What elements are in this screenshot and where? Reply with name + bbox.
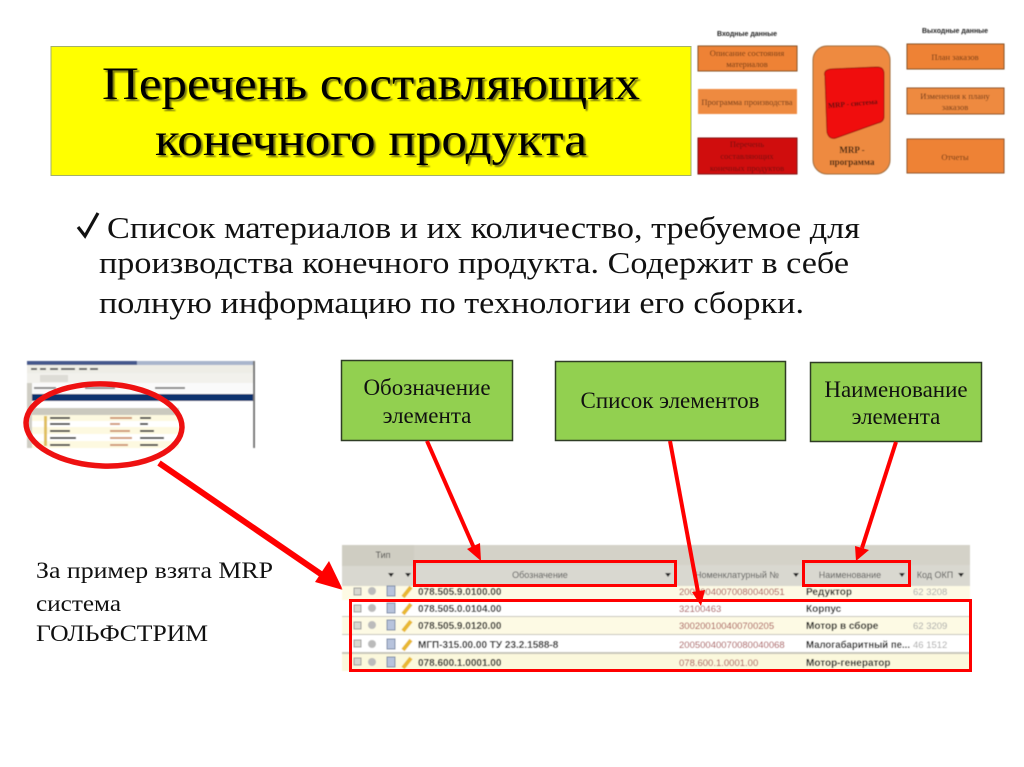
title text shadow: Перечень составляющих xyxy=(104,60,642,112)
table header: Номенклатурный № xyxy=(695,570,779,580)
arrow: screenshot to table xyxy=(159,463,343,590)
input box: materials state: Описание состояния xyxy=(710,48,784,58)
description text xyxy=(78,210,860,320)
heading: output data: Выходные данные xyxy=(922,28,988,35)
check mark xyxy=(78,213,98,236)
output box: plan changes xyxy=(907,88,1004,114)
table header xyxy=(342,545,970,586)
output box: plan changes: заказов xyxy=(942,102,968,112)
column: name: Корпус xyxy=(806,604,842,615)
title text: конечного продукта xyxy=(155,114,587,166)
row icons xyxy=(354,586,411,668)
arrow: name label to header xyxy=(855,442,896,561)
software screenshot thumbnail xyxy=(27,361,255,448)
description text: полную информацию по технологии его сборки. xyxy=(99,285,804,320)
column: item number: 32100463 xyxy=(679,604,721,615)
MRP programme block: программа xyxy=(830,157,875,167)
callout: green label element name: Наименование xyxy=(824,377,968,402)
red highlight: rows xyxy=(350,600,970,670)
column: designation: 078.505.9.0100.00 xyxy=(418,587,502,598)
input box: component list: составляющих xyxy=(720,151,774,161)
column: item number: 20050040070080040051 xyxy=(679,587,785,598)
example note xyxy=(36,558,273,646)
input box: component list xyxy=(698,138,797,174)
heading: input data: Входные данные xyxy=(717,31,777,38)
description text: производства конечного продукта. Содержит в себе xyxy=(99,245,849,280)
MRP diagram thumbnail xyxy=(698,28,1004,174)
column: item number: 300200100400700205 xyxy=(679,621,774,632)
arrow: designation label to header xyxy=(427,441,481,561)
input box: materials state xyxy=(698,46,797,71)
column: item number xyxy=(679,587,785,669)
column: item number: 20050040070080040068 xyxy=(679,640,785,651)
column: name: Мотор-генератор xyxy=(806,658,890,669)
example note: система xyxy=(36,591,121,616)
column: name: Малогабаритный пе... xyxy=(806,639,910,651)
arrow: element list label to rows xyxy=(670,441,705,606)
output box: reports: Отчеты xyxy=(941,152,969,162)
column: name: Редуктор xyxy=(806,587,852,598)
column: code: 62 3208 xyxy=(913,587,947,598)
output box: order plan: План заказов xyxy=(931,52,979,62)
callout: green label element list: Список элементов xyxy=(581,388,760,413)
example note: За пример взята MRP xyxy=(36,558,273,583)
input box: component list: конечных продуктов xyxy=(710,163,784,173)
column: designation: 078.505.0.0104.00 xyxy=(418,604,502,615)
callout: green label designation xyxy=(342,360,512,440)
MRP system tile: MRP - система xyxy=(828,97,878,110)
red highlight: designation header xyxy=(414,562,676,586)
input box: production programme xyxy=(698,89,797,114)
red highlight: name header xyxy=(804,562,910,586)
column: name: Мотор в сборе xyxy=(806,620,879,632)
title banner xyxy=(51,46,691,176)
column: code: 62 3209 xyxy=(913,621,947,632)
column: designation: 078.505.9.0120.00 xyxy=(418,621,502,632)
title text xyxy=(102,58,640,166)
callout: green label element name xyxy=(810,362,982,442)
column: name xyxy=(806,587,910,669)
MRP programme block xyxy=(813,46,890,174)
red ellipse highlight xyxy=(25,381,183,469)
output box: reports xyxy=(907,139,1004,173)
column: code: 46 1512 xyxy=(913,640,947,651)
description text: Список материалов и их количество, требуемое для xyxy=(107,210,860,245)
column: designation: МГП-315.00.00 ТУ 23.2.1588-8 xyxy=(418,640,559,651)
example note: ГОЛЬФСТРИМ xyxy=(36,621,208,646)
MRP programme block: MRP - xyxy=(839,145,865,155)
input box: component list: Перечень xyxy=(730,139,764,149)
title text shadow: конечного продукта xyxy=(157,116,589,168)
callout: green label element list xyxy=(556,362,786,440)
column: designation: 078.600.1.0001.00 xyxy=(418,658,502,669)
table header: Тип xyxy=(375,550,391,560)
callout: green label element name: элемента xyxy=(852,404,940,429)
title text: Перечень составляющих xyxy=(102,58,640,110)
table rows background xyxy=(342,586,970,671)
callout: green label designation: элемента xyxy=(383,403,471,428)
title text shadow xyxy=(104,60,642,168)
callout: green label designation: Обозначение xyxy=(363,375,491,400)
table header: Обозначение xyxy=(512,570,568,580)
column: code xyxy=(913,587,947,651)
column: designation xyxy=(418,587,559,669)
input box: production programme: Программа производства xyxy=(701,97,793,107)
output box: order plan xyxy=(907,44,1004,69)
output box: plan changes: Изменения к плану xyxy=(920,91,991,101)
table header: Код ОКП xyxy=(917,570,953,580)
input box: materials state: материалов xyxy=(726,59,768,69)
table header: Наименование xyxy=(819,570,881,580)
data table xyxy=(342,545,970,671)
column: item number: 078.600.1.0001.00 xyxy=(679,658,758,669)
